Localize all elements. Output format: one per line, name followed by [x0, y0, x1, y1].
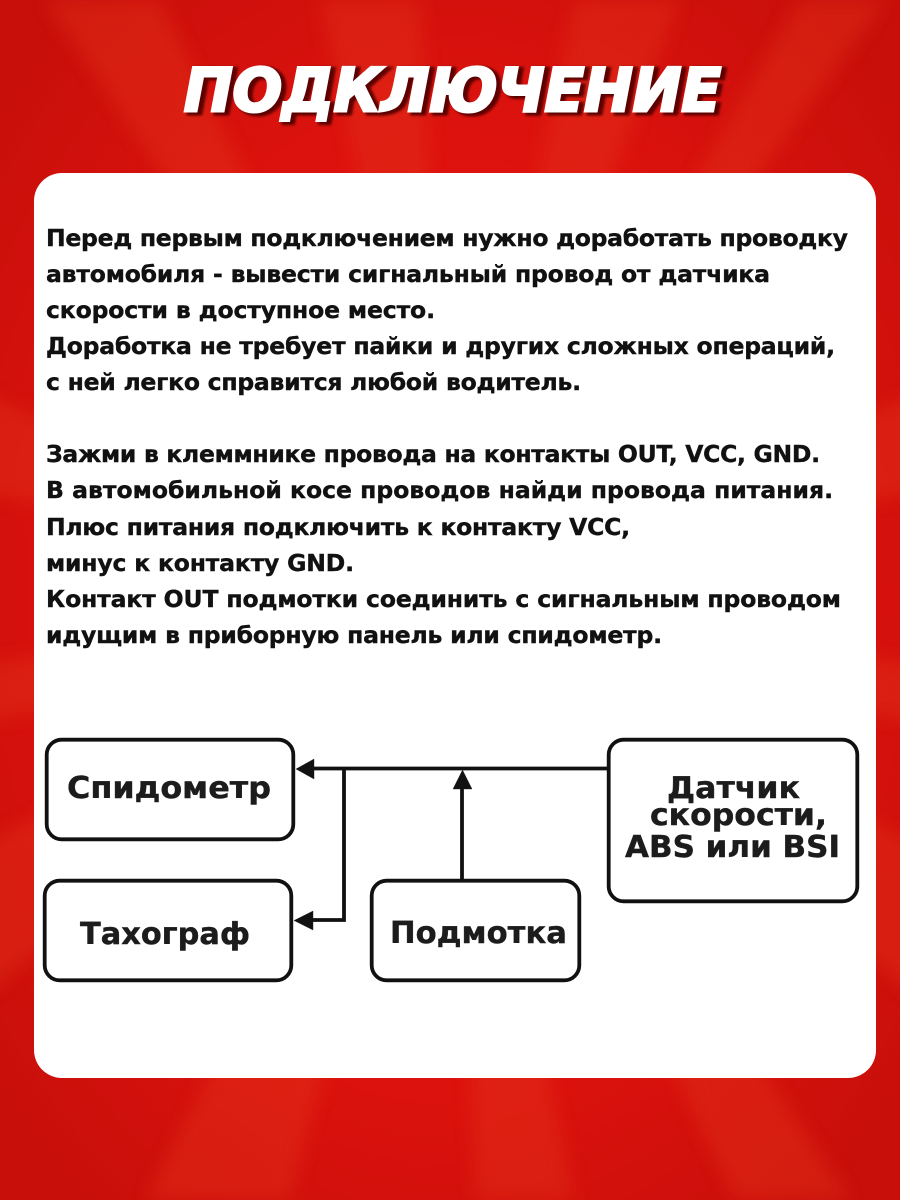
text block: instructions: с ней легко справится любой водитель. — [46, 368, 581, 396]
panel: white card — [34, 173, 876, 1078]
text block: instructions: В автомобильной косе проводов найди провода питания. — [46, 476, 833, 504]
text block: instructions: Зажми в клеммнике провода на контакты OUT, VCC, GND. — [46, 440, 820, 468]
text block: instructions: минус к контакту GND. — [46, 549, 354, 577]
box: winding — [372, 881, 579, 980]
title: ПОДКЛЮЧЕНИЕ — [184, 56, 721, 126]
box: speed sensor: ABS или BSI — [625, 830, 840, 865]
box: tachograph: Тахограф — [80, 917, 250, 952]
arrow: sensor to speedometer — [296, 759, 608, 779]
arrow: branch to tachograph — [294, 768, 344, 930]
title: ПОДКЛЮЧЕНИЕ — [188, 58, 725, 128]
arrow: winding to signal line — [453, 770, 472, 881]
text block: instructions: автомобиля - вывести сигнальный провод от датчика — [46, 260, 770, 288]
box: speed sensor — [609, 740, 857, 901]
text block: instructions: Перед первым подключением нужно доработать проводку — [46, 224, 848, 252]
text block: instructions: Доработка не требует пайки и других сложных операций, — [46, 332, 835, 360]
box: speedometer — [47, 740, 293, 839]
box: winding: Подмотка — [390, 916, 567, 951]
box: tachograph — [45, 881, 291, 980]
box: speedometer: Спидометр — [67, 771, 271, 806]
text block: instructions: идущим в приборную панель или спидометр. — [46, 621, 662, 649]
text block: instructions: скорости в доступное место. — [46, 296, 435, 324]
text block: instructions: Плюс питания подключить к контакту VCC, — [46, 513, 630, 541]
box: speed sensor: скорости, — [650, 798, 827, 833]
text block: instructions: Контакт OUT подмотки соединить с сигнальным проводом — [46, 585, 841, 613]
box: speed sensor: Датчик — [667, 771, 800, 806]
